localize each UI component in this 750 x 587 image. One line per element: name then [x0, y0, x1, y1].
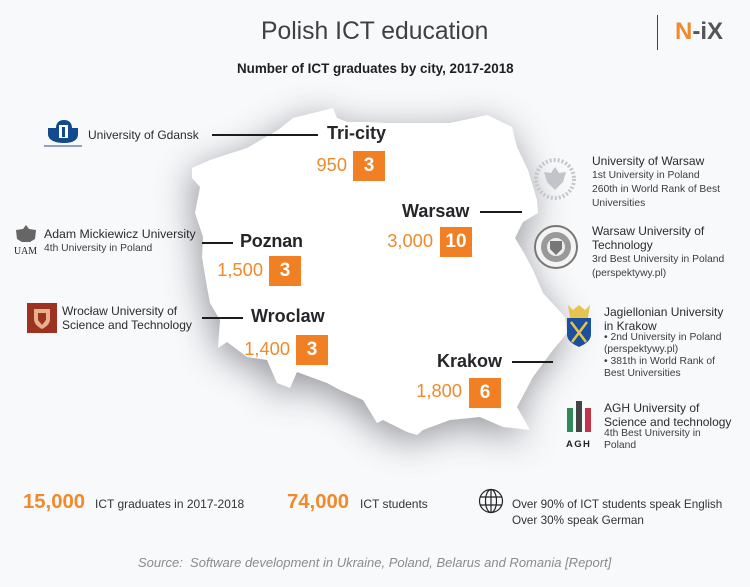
city: Poznan: 3: [280, 260, 290, 281]
city: Tri-city: 3: [364, 155, 374, 176]
university: Jagiellonian: Jagiellonian University: [604, 305, 723, 319]
university: Adam Mickiewicz: [14, 225, 196, 256]
university: Warsaw Tech: Technology: [592, 238, 653, 252]
university: Warsaw: University of Warsaw: [592, 154, 704, 168]
city: Poznan: [202, 231, 303, 286]
icon: UAM eagle: [14, 225, 37, 256]
city: Poznan: Poznan: [240, 231, 303, 251]
university: Wroclaw Tech: [27, 303, 192, 333]
icon: AGH logo: [566, 401, 591, 448]
university: Warsaw: Universities: [592, 198, 645, 209]
university: Warsaw Tech: (perspektywy.pl): [592, 268, 666, 279]
university: Gdansk: [44, 120, 199, 147]
university: Warsaw: 260th in World Rank of Best: [592, 184, 720, 195]
stat: languages: Over 90% of ICT students speak English: [512, 498, 722, 511]
university: Jagiellonian: [567, 305, 724, 379]
stat: graduates: ICT graduates in 2017-2018: [95, 497, 244, 511]
stat: students: [287, 491, 428, 513]
icon: Warsaw seal: [534, 158, 576, 200]
university: Adam Mickiewicz: 4th University in Poland: [44, 243, 152, 254]
icon: Gdansk crest: [44, 120, 82, 147]
university: Warsaw Tech: 3rd Best University in Poland: [592, 254, 724, 265]
icon: globe: [478, 488, 504, 514]
university: Jagiellonian: • 2nd University in Poland: [604, 332, 722, 343]
stat: languages: [478, 488, 722, 526]
city: Tri-city: [212, 123, 386, 181]
university: AGH: Science and technology: [604, 415, 731, 429]
subtitle: Number of ICT graduates by city, 2017-2018: [237, 61, 514, 76]
logo: N-iX: N-iX: [675, 18, 723, 45]
icon: Warsaw Tech seal: [534, 225, 578, 269]
university: AGH: AGH University of: [604, 401, 699, 415]
university: Wroclaw Tech: Science and Technology: [62, 318, 192, 332]
university: Warsaw: [534, 154, 720, 209]
city: Tri-city: 950: [316, 154, 347, 175]
city: Warsaw: 10: [445, 231, 467, 252]
university: AGH: Poland: [604, 440, 636, 451]
city: Krakow: Krakow: [437, 351, 502, 371]
city: Wroclaw: 3: [307, 339, 317, 360]
city: Poznan: 1,500: [217, 259, 263, 280]
university: Jagiellonian: • 381th in World Rank of: [604, 356, 715, 367]
icon: Jagiellonian crest: [567, 305, 591, 347]
city: Warsaw: Warsaw: [402, 201, 469, 221]
city: Krakow: 1,800: [416, 380, 462, 401]
university: Gdansk: University of Gdansk: [88, 128, 199, 142]
city: Wroclaw: Wroclaw: [251, 306, 325, 326]
university: Jagiellonian: Best Universities: [604, 368, 681, 379]
university: Warsaw: 1st University in Poland: [592, 170, 700, 181]
stat: students: 74,000: [287, 491, 349, 513]
university: Adam Mickiewicz: Adam Mickiewicz University: [44, 227, 196, 241]
city: Warsaw: [387, 201, 522, 257]
stat: students: ICT students: [360, 497, 428, 511]
city: Krakow: [416, 351, 553, 408]
city: Warsaw: 3,000: [387, 230, 433, 251]
stat: graduates: 15,000: [23, 491, 85, 513]
source: Source: Software development in Ukraine, Poland, Belarus and Romania [Report]: [138, 555, 611, 570]
icon: Wroclaw crest: [27, 303, 57, 333]
stat: graduates: [23, 491, 244, 513]
logo: N-iX: [657, 15, 730, 50]
university: Jagiellonian: (perspektywy.pl): [604, 344, 678, 355]
city: Wroclaw: 1,400: [244, 338, 290, 359]
city: Krakow: 6: [480, 382, 490, 403]
stat: languages: Over 30% speak German: [512, 514, 644, 526]
university: Wroclaw Tech: Wrocław University of: [62, 304, 177, 318]
city: Wroclaw: [202, 306, 328, 365]
university: AGH: [566, 401, 732, 451]
university: Warsaw Tech: [534, 224, 724, 279]
title: Polish ICT education: [261, 18, 488, 45]
university: AGH: 4th Best University in: [604, 428, 701, 439]
university: Warsaw Tech: Warsaw University of: [592, 224, 704, 238]
university: Jagiellonian: in Krakow: [604, 319, 657, 333]
city: Tri-city: Tri-city: [327, 123, 386, 143]
